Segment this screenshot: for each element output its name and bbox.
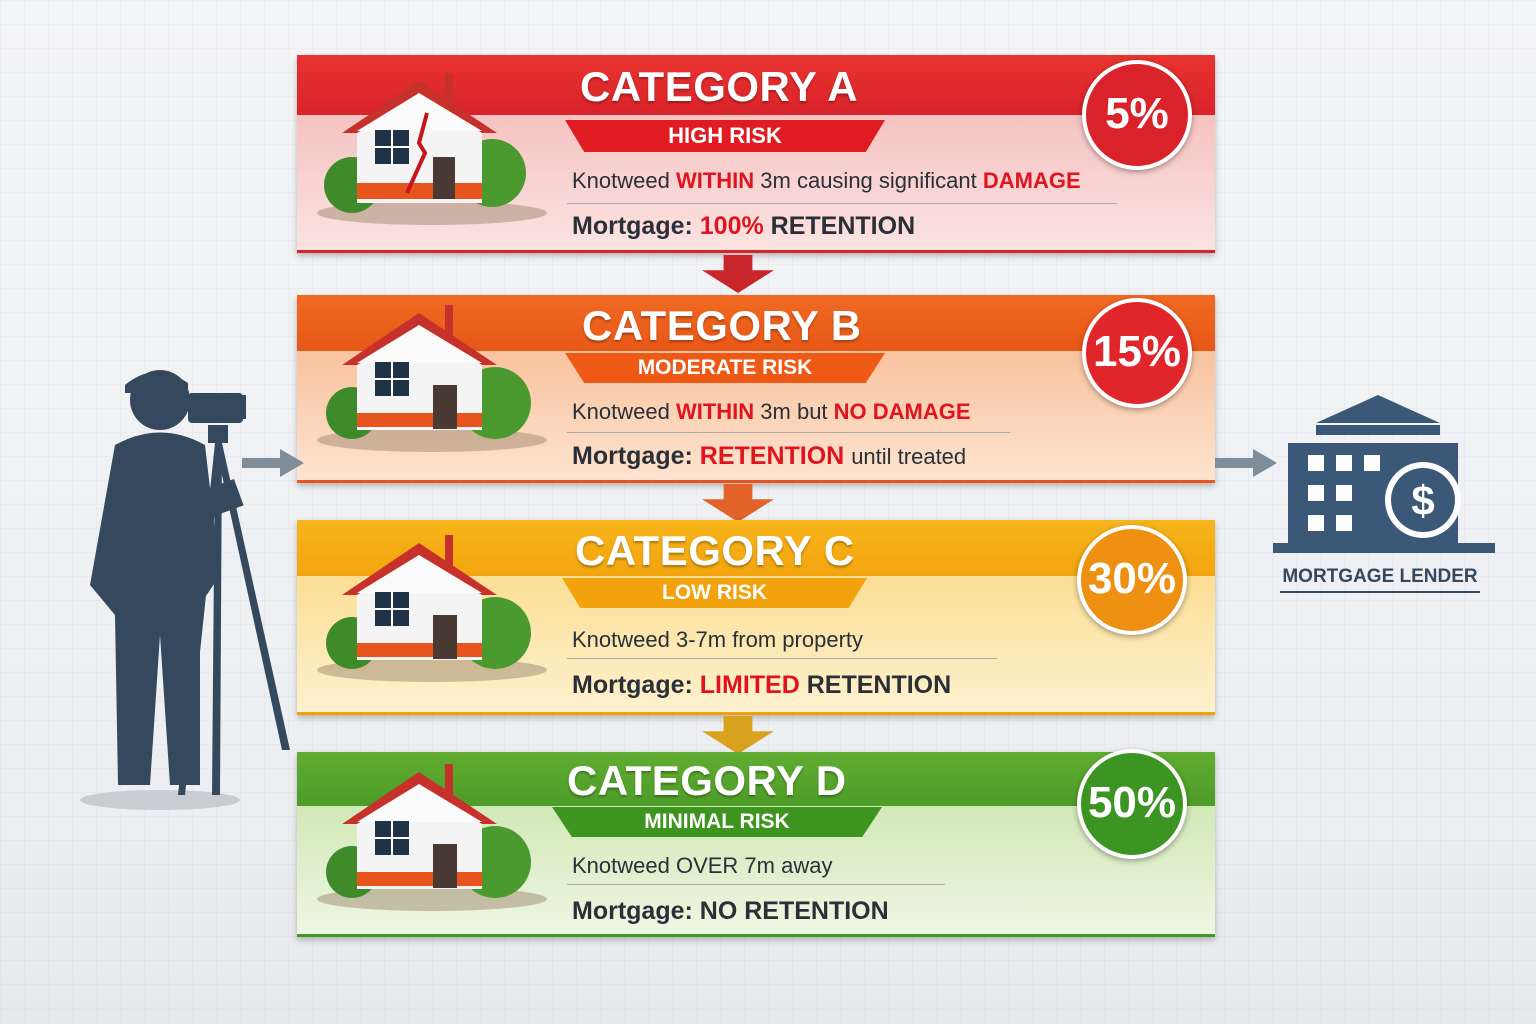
title B: CATEGORY B [582,302,862,349]
badge 50% [1077,749,1187,859]
badge 15% [1082,298,1192,408]
text: mortgage C: Mortgage: LIMITED RETENTION [572,671,951,699]
header band B [297,295,1215,351]
arrow: A to B [702,255,774,293]
text: mortgage D: Mortgage: NO RETENTION [572,897,889,925]
title C: CATEGORY C [575,527,855,574]
icon: house D [317,764,547,911]
badge 50%: 50% [1088,778,1176,827]
arrow: C to D [702,716,774,754]
title D: CATEGORY D [567,757,847,804]
icon: mortgage lender building [1273,395,1495,553]
ribbon: low risk [562,578,867,608]
header band A [297,55,1215,115]
title A: CATEGORY A [580,63,858,110]
badge 30% [1077,525,1187,635]
panel: category A [297,55,1215,253]
panel: category B [297,295,1215,483]
panel: category C [297,520,1215,715]
icon: cracked house A [317,73,547,225]
badge 15%: 15% [1093,327,1181,376]
text: description C: Knotweed 3-7m from property [572,627,863,652]
header band C [297,520,1215,576]
panel: category D [297,752,1215,937]
header band D [297,752,1215,806]
icon: house C [317,535,547,682]
ribbon: low risk: LOW RISK [662,581,767,604]
text: description A: Knotweed WITHIN 3m causing significant DAMAGE [572,168,1081,193]
icon: surveyor silhouette [80,370,290,810]
badge 5%: 5% [1105,89,1169,138]
text: mortgage A: Mortgage: 100% RETENTION [572,212,915,240]
arrow: panels to lender [1215,449,1277,477]
arrow: surveyor to panels [242,449,304,477]
badge 5% [1082,60,1192,170]
arrow: B to C [702,484,774,522]
badge 30%: 30% [1088,554,1176,603]
text: description D: Knotweed OVER 7m away [572,853,832,878]
label: mortgage lender: MORTGAGE LENDER [1282,566,1478,587]
text: description B: Knotweed WITHIN 3m but NO DAMAGE [572,399,971,424]
ribbon: minimal risk [552,807,882,837]
ribbon: minimal risk: MINIMAL RISK [644,810,790,833]
icon: house B [317,305,547,452]
text: mortgage B: Mortgage: RETENTION until treated [572,442,966,470]
ribbon: high risk: HIGH RISK [668,123,782,148]
ribbon: high risk [565,120,885,152]
ribbon: moderate risk [565,353,885,383]
icon: mortgage lender building: $ [1411,477,1435,524]
ribbon: moderate risk: MODERATE RISK [638,356,812,379]
